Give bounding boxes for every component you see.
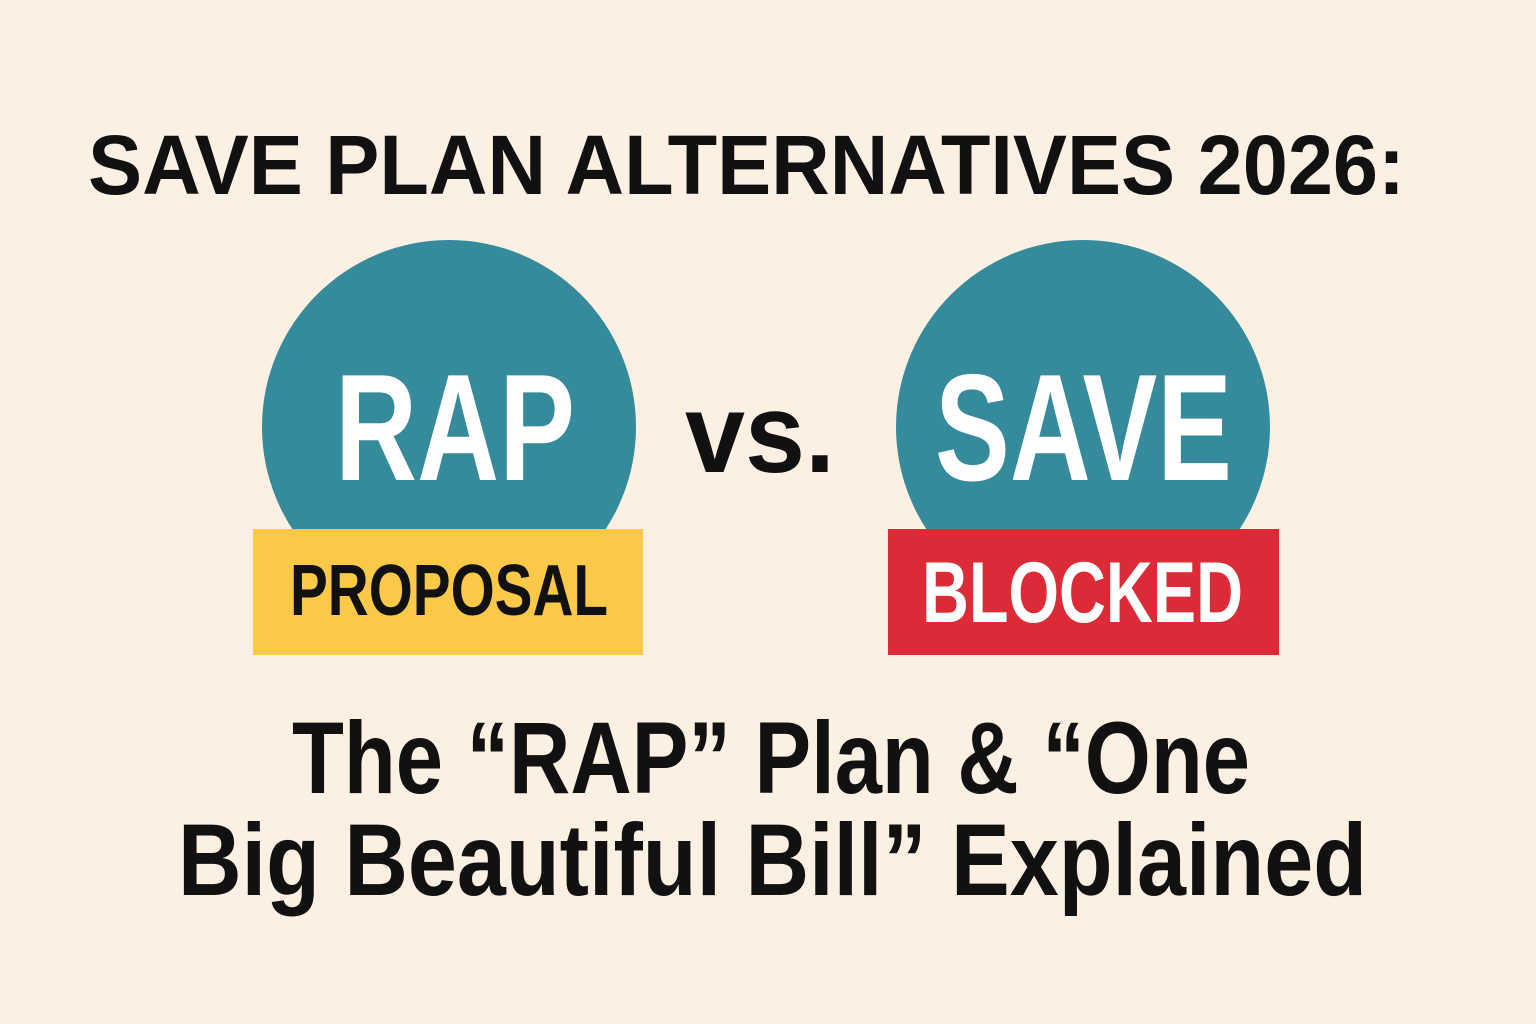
proposal tag bbox=[253, 529, 643, 655]
panel: RAP badge bbox=[253, 240, 643, 655]
vs text: vs. bbox=[685, 371, 835, 496]
subtitle: The “RAP” Plan & “One bbox=[292, 701, 1250, 815]
SAVE label: SAVE bbox=[935, 343, 1232, 513]
subtitle: Big Beautiful Bill” Explained bbox=[178, 803, 1367, 917]
RAP label: RAP bbox=[335, 343, 575, 513]
title: SAVE PLAN ALTERNATIVES 2026: bbox=[88, 118, 1405, 212]
icon: SAVE circle bbox=[896, 240, 1270, 614]
proposal tag: PROPOSAL bbox=[290, 551, 608, 631]
icon: RAP circle bbox=[262, 240, 636, 614]
blocked tag: BLOCKED bbox=[922, 545, 1243, 641]
panel: SAVE badge bbox=[888, 240, 1279, 655]
subtitle bbox=[178, 701, 1367, 917]
blocked tag bbox=[888, 529, 1279, 655]
